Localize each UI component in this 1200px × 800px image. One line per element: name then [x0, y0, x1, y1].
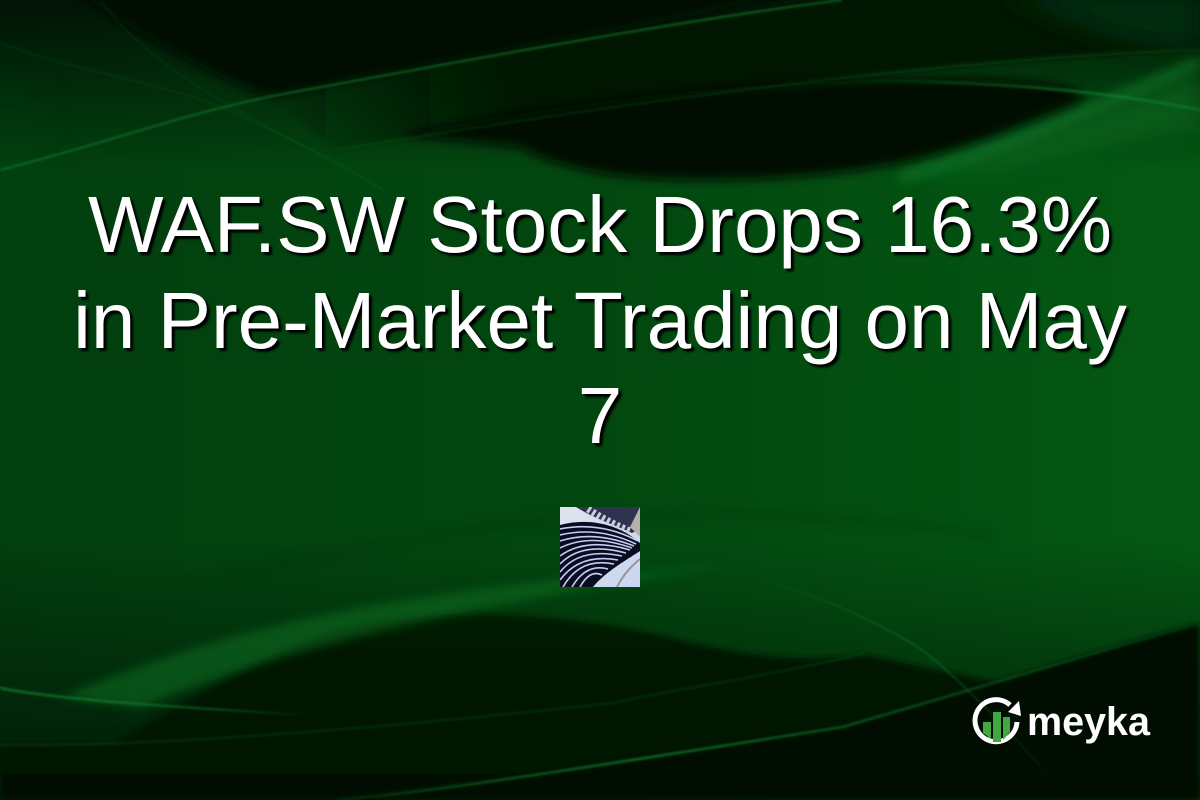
thumbnail: ribbed metal turbine image — [560, 507, 640, 587]
wordmark: meyka — [1027, 700, 1151, 744]
logo: meyka — [972, 697, 1151, 744]
icon: circular arrow with bars — [975, 700, 1021, 742]
title: WAF.SW Stock Drops 16.3% — [88, 180, 1112, 269]
title: in Pre-Market Trading on May — [73, 276, 1127, 364]
title — [73, 180, 1130, 460]
title: 7 — [578, 371, 622, 460]
